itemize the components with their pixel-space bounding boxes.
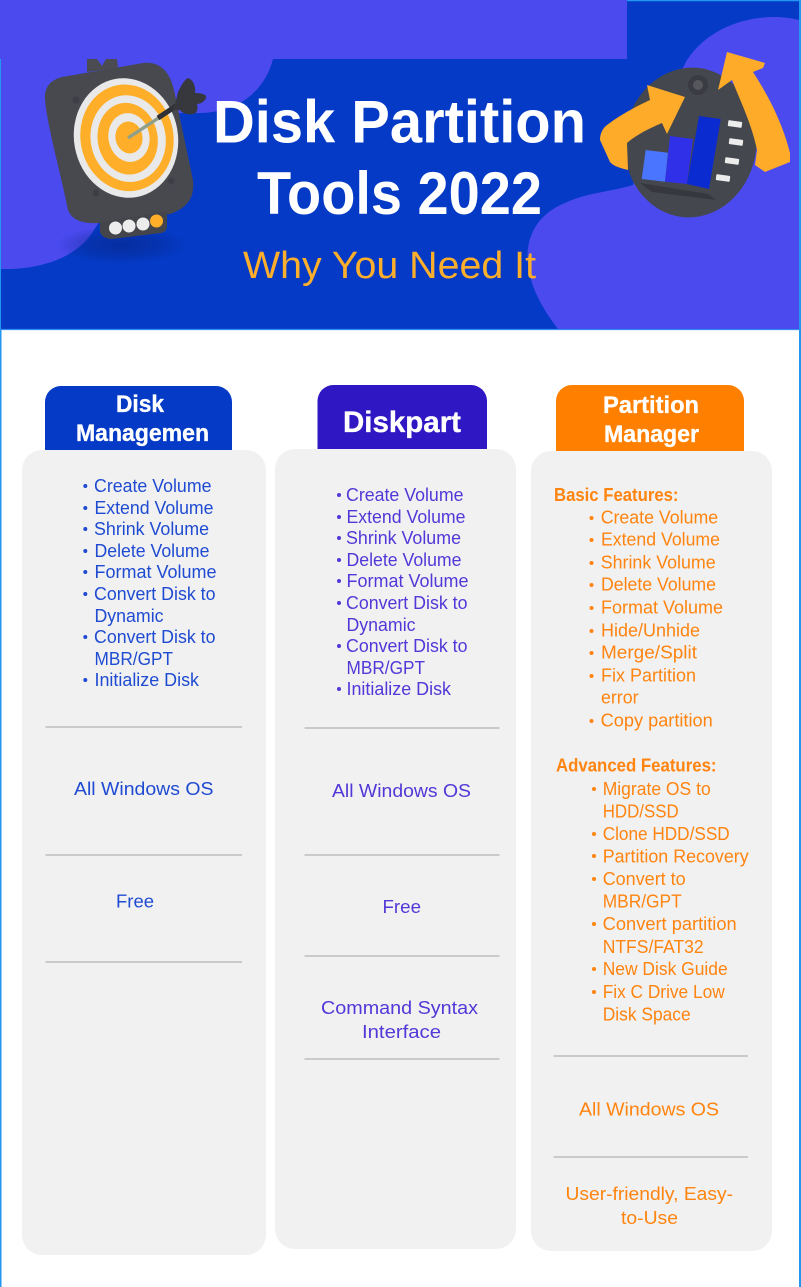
advanced features list: Convert partition [603,914,737,934]
interface type [566,1184,733,1228]
feature list: Convert Disk to [346,593,468,613]
advanced features list: New Disk Guide [603,959,728,979]
feature list: Create Volume [94,476,212,496]
feature list: Dynamic [94,606,164,626]
left purple blob [1,59,273,269]
title [213,88,586,227]
advanced features list: HDD/SSD [603,802,679,822]
feature list: Convert Disk to [94,584,216,604]
feature list: Format Volume [346,571,468,591]
feature list: MBR/GPT [346,658,425,678]
interface type [321,998,478,1042]
feature list: Shrink Volume [94,519,209,539]
right purple blob [527,17,799,329]
feature list: Create Volume [346,485,464,505]
heading tab: Disk Management [45,386,232,451]
basic features list [554,485,723,730]
header banner [0,0,801,330]
feature list: Initialize Disk [94,670,200,690]
advanced features list: Disk Space [603,1004,691,1024]
OS support: All Windows OS [332,781,471,801]
advanced features list: Partition Recovery [603,846,749,866]
heading tab: Diskpart [318,385,487,449]
interface type: User-friendly, Easy- [566,1184,733,1204]
heading tab: Disk Management: Disk [116,391,165,418]
feature list: Convert Disk to [94,627,216,647]
feature list: Shrink Volume [346,528,461,548]
basic features list: Copy partition [601,710,713,730]
heading tab: Partition Manager [556,385,744,451]
subtitle: Why You Need It [243,245,536,287]
feature list: Extend Volume [346,507,466,527]
heading tab: Partition Manager: Partition [603,392,699,419]
advanced features list: MBR/GPT [603,892,682,912]
advanced features list: Fix C Drive Low [603,982,726,1002]
feature list: Delete Volume [94,541,210,561]
basic features list: Shrink Volume [601,552,716,572]
price: Free [382,897,421,917]
panel: Partition Manager [531,385,772,1251]
feature list: MBR/GPT [94,649,173,669]
advanced features list: NTFS/FAT32 [603,937,704,957]
OS support: All Windows OS [74,779,214,799]
feature list: Extend Volume [94,498,214,518]
basic features list: Fix Partition [601,666,696,686]
arrow: right up arrow [718,52,790,172]
interface type: Interface [362,1022,441,1042]
advanced features list: Convert to [603,869,686,889]
feature list: Dynamic [346,615,416,635]
icon: bar chart with arrows [600,52,790,224]
feature list: Delete Volume [346,550,462,570]
title: Disk Partition [213,88,586,156]
advanced features list: Clone HDD/SSD [603,824,730,844]
advanced features list [556,756,749,1024]
panel: Diskpart [275,385,516,1249]
advanced features list: Migrate OS to [603,779,711,799]
basic features list: error [601,688,638,708]
OS support: All Windows OS [579,1100,719,1120]
price: Free [116,892,154,912]
heading tab: Partition Manager: Manager [604,421,699,448]
feature list [83,476,216,690]
basic features list: Create Volume [601,508,718,528]
advanced features list: Advanced Features: [556,756,716,776]
feature list: Convert Disk to [346,636,468,656]
basic features list: Extend Volume [601,530,720,550]
feature list [337,485,468,699]
feature list: Format Volume [94,562,216,582]
arrow: left up arrow [600,85,685,170]
basic features list: Format Volume [601,598,723,618]
basic features list: Delete Volume [601,574,716,594]
heading tab: Diskpart: Diskpart [343,406,461,439]
panel: Disk Management [22,386,266,1255]
interface type: Command Syntax [321,998,478,1018]
basic features list: Merge/Split [601,642,697,662]
top purple strip [0,0,627,59]
basic features list: Basic Features: [554,485,678,505]
heading tab: Disk Management: Managemen [76,420,209,447]
feature list: Initialize Disk [346,679,452,699]
basic features list: Hide/Unhide [601,620,700,640]
title: Tools 2022 [257,160,542,227]
icon: dartboard [45,59,206,264]
interface type: to-Use [621,1208,678,1228]
